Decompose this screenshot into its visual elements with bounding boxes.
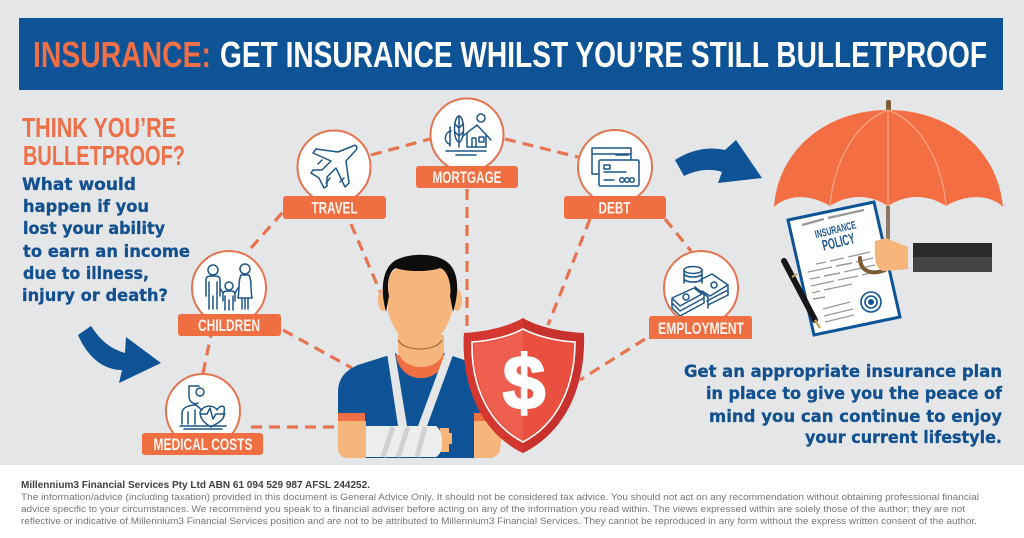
neck	[398, 335, 444, 367]
shield with dollar sign: $	[503, 341, 545, 426]
left text block: THINK YOU’RE	[22, 112, 176, 143]
node: debt	[564, 130, 666, 219]
left text block: injury or death?	[22, 286, 168, 306]
head	[388, 264, 452, 352]
ears	[378, 289, 462, 311]
left text block: due to illness,	[23, 264, 149, 284]
collar	[396, 355, 446, 378]
person with sling	[338, 255, 501, 458]
footer disclaimer: advice specific to your circumstances. We recommend you speak to a financial adviser before acting on any of the information you read within. The views expressed within are solely those of the author; they are not	[21, 504, 965, 515]
left sleeve cuff and arm	[338, 413, 365, 421]
icon: house and tree	[445, 114, 491, 155]
node: medical costs	[142, 374, 263, 455]
icon: money stacks and coins	[672, 266, 728, 316]
icon: family	[206, 264, 252, 310]
icon: credit cards	[592, 148, 639, 186]
umbrella handle and hand	[860, 238, 908, 272]
icon: doctor and heart	[180, 386, 226, 429]
right call-to-action text: in place to give you the peace of	[706, 384, 1003, 404]
right call-to-action text: your current lifestyle.	[805, 428, 1002, 448]
left text block: BULLETPROOF?	[23, 140, 185, 171]
hand	[440, 428, 452, 452]
node: travel	[283, 130, 386, 219]
right call-to-action text: Get an appropriate insurance plan	[684, 362, 1002, 382]
arrow: left, pointing to the person	[78, 326, 161, 383]
connector lines	[203, 139, 691, 427]
title banner: INSURANCE:	[33, 34, 211, 75]
arrow: right, pointing to the umbrella	[675, 140, 762, 183]
footer disclaimer: reflective or indicative of Millennium3 Financial Services position and are not to be attributed to Millennium3 Financial Services. They cannot be reproduced in any form without the express written consent of the author.	[21, 516, 977, 527]
cast	[366, 426, 442, 457]
pen	[784, 261, 820, 328]
insurance policy document: INSURANCE	[814, 219, 857, 241]
title banner	[19, 18, 1003, 90]
left text block: to earn an income	[23, 242, 190, 262]
right call-to-action text	[684, 362, 1003, 448]
left text block: What would	[22, 175, 136, 195]
black sleeve	[913, 243, 992, 272]
footer disclaimer	[21, 480, 979, 527]
node: medical costs: MEDICAL COSTS	[154, 436, 252, 454]
left text block: happen if you	[23, 197, 149, 217]
sling	[387, 353, 453, 426]
node: employment: EMPLOYMENT	[658, 320, 744, 338]
right call-to-action text: mind you can continue to enjoy	[709, 407, 1002, 427]
insurance policy document: POLICY	[821, 230, 857, 255]
left text block	[22, 112, 190, 306]
node: travel: TRAVEL	[312, 200, 358, 218]
node: children	[178, 251, 281, 336]
insurance policy document	[788, 202, 900, 335]
icon: airplane	[311, 145, 357, 188]
node: mortgage: MORTGAGE	[432, 169, 502, 187]
node: employment	[649, 251, 752, 339]
footer disclaimer: Millennium3 Financial Services Pty Ltd ABN 61 094 529 987 AFSL 244252.	[21, 480, 370, 491]
shirt	[338, 353, 492, 458]
hair	[383, 255, 457, 312]
right arm	[474, 413, 500, 421]
shield with dollar sign	[464, 318, 584, 453]
left text block: lost your ability	[23, 219, 165, 239]
umbrella	[774, 100, 1003, 242]
node: mortgage	[416, 98, 518, 188]
node: children: CHILDREN	[198, 317, 260, 335]
node: debt: DEBT	[598, 200, 630, 218]
footer disclaimer: The information/advice (including taxation) provided in this document is General Advice Only. It should not be considered tax advice. You should not act on any recommendation without obtaining professional financial	[21, 492, 979, 503]
